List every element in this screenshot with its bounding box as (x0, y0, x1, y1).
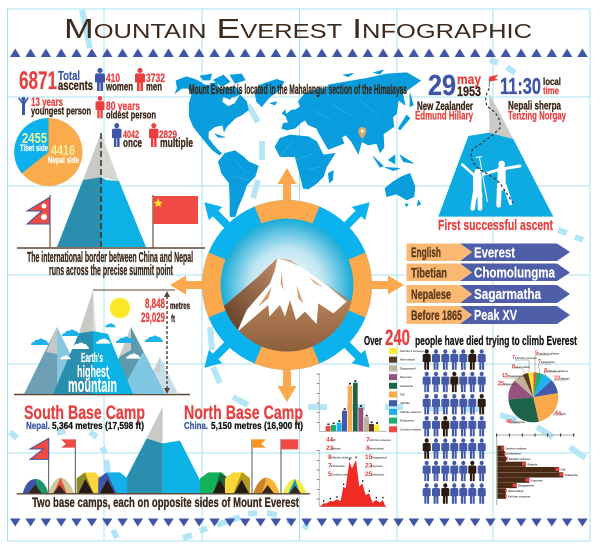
bottom triangle border (8, 518, 590, 528)
border caption: runs across the precise summit point (49, 263, 173, 279)
death counts: Fall into crevasse (369, 438, 391, 442)
death counts: 15 (365, 454, 373, 461)
name label: English (406, 244, 570, 262)
pie chart: causes of death: Cerebral oedema (538, 352, 560, 356)
name label: Tibetan (406, 264, 570, 282)
death counts: 8 (366, 445, 370, 452)
name label: Tibetan: Tibetian (411, 264, 447, 280)
climber names: Nepali sherpa (508, 100, 561, 112)
name label: English: Everest (474, 244, 515, 262)
horizontal bar chart: Exposure (531, 478, 543, 482)
pie chart: causes of death: Exhaustion (541, 360, 555, 364)
climber names: Edmund Hillary (415, 110, 473, 122)
height measurement arrow: ft (171, 314, 175, 325)
bar chart legend: Exhaustion (400, 419, 414, 423)
Earth's highest mountain illustration: highest (77, 362, 109, 381)
horizontal bar chart: Avalanche (565, 473, 578, 477)
North Base Camp heading: China. (184, 420, 208, 432)
death counts: 23 (326, 445, 334, 452)
name label: before 1865 (406, 306, 570, 324)
pie chart: causes of death: 15 (502, 373, 508, 379)
name label: before 1865: Peak XV (474, 307, 517, 324)
height measurement arrow: 29,029 (141, 309, 165, 325)
pie chart: causes of death: Avalanche (512, 420, 525, 424)
name label: Nepalese: Nepalese (411, 286, 451, 302)
pie chart: causes of death: Altitude sickness (547, 369, 569, 373)
North Base Camp heading (184, 402, 303, 432)
statistics: once and multiple: multiple (160, 135, 193, 150)
pie chart: causes of death: 23 (554, 376, 560, 382)
death counts: Altitude (331, 446, 341, 450)
deaths heading (364, 325, 578, 350)
first ascent date (428, 70, 481, 102)
pie chart: causes of death: 7 (538, 359, 541, 365)
central mountain illustration (220, 218, 354, 357)
death counts: 23 (365, 462, 373, 470)
deaths heading: Over (364, 334, 382, 348)
death counts: Exposure (371, 464, 383, 468)
pie chart: causes of death: Fall into crevasse (515, 356, 537, 360)
first ascent date: may (457, 71, 481, 87)
pie chart: causes of death: Exposure (504, 382, 516, 386)
pie chart: Tibet and Nepal side: Tibet side (20, 143, 48, 153)
area chart (317, 450, 387, 507)
pie chart: causes of death: 5 (535, 350, 538, 356)
death counts: Altitude sickness (331, 456, 353, 460)
death counts: 25 (365, 471, 373, 478)
South Base Camp heading: Nepal. (26, 420, 50, 432)
statistics: ascents: 6871 (19, 67, 57, 95)
death counts: 5 (328, 471, 332, 478)
horizontal bar chart: Fall (561, 468, 565, 472)
bar chart legend: Fall into a crevasse (400, 349, 424, 353)
horizontal bar chart (497, 433, 578, 505)
North Base Camp heading: 5,150 metres (16,900 ft) (211, 420, 303, 432)
bar chart legend: Heart attack (400, 358, 415, 362)
pictogram: people who died (423, 349, 486, 504)
base camps illustration (17, 407, 310, 494)
horizontal bar chart: Exhaustion (507, 452, 521, 456)
death counts: Heart attack (369, 446, 384, 450)
statistics: ages: 13 years (31, 95, 63, 109)
statistics: ages (18, 95, 156, 122)
name label: Nepalese: Sagarmatha (474, 286, 542, 303)
Earth's highest mountain illustration: Earth's (81, 350, 103, 365)
arrows around the central compass (170, 168, 404, 402)
death counts: Exhaustion (331, 464, 345, 468)
Earth's highest mountain illustration: mountain (68, 375, 117, 397)
death counts: Disappeared (371, 456, 387, 460)
top triangle border (8, 48, 590, 58)
statistics: ascents: Total (58, 68, 80, 83)
pie chart: causes of death: 7 (512, 355, 515, 361)
icon: map pin (358, 127, 366, 139)
pie chart: causes of death: 25 (498, 381, 504, 387)
height measurement arrow: metres (170, 301, 190, 312)
statistics: ascents: 410 (106, 73, 120, 85)
world map (175, 70, 421, 217)
pie chart: Tibet and Nepal side (14, 118, 83, 186)
first ascent caption: First successful ascent (438, 218, 553, 234)
bar chart legend: Exposure (400, 375, 412, 379)
first ascent time: time (543, 85, 559, 97)
statistics: ascents: men (146, 82, 162, 94)
name label: Tibetan: Chomolungma (474, 264, 556, 282)
pie chart: causes of death: 8 (544, 368, 547, 374)
horizontal bar chart: Disappeared (518, 484, 534, 488)
horizontal bar chart: Altitude sickness (509, 457, 531, 461)
bar chart legend: Cerebral oedema (400, 427, 422, 431)
border mountain with flags (17, 133, 205, 248)
statistics: once and multiple: 4042 (123, 129, 139, 141)
border caption (27, 250, 193, 279)
statistics: once and multiple: once (123, 135, 142, 150)
pie chart: causes of death: Fall (561, 412, 566, 416)
name label: before 1865: Before 1865 (411, 307, 462, 323)
title: Mountain Everest Infographic (64, 13, 532, 44)
first ascent date: 29 (428, 70, 456, 102)
first ascent time: local (543, 76, 561, 88)
bar chart legend: Fall (400, 392, 405, 396)
pie chart: causes of death: 44 (555, 411, 562, 417)
name label: English: English (411, 244, 441, 260)
bar chart legend (389, 348, 424, 432)
deaths heading: 240 (385, 325, 410, 350)
pie chart: causes of death: Disappeared (508, 374, 524, 378)
pie chart: Tibet and Nepal side: 2455 (22, 130, 47, 147)
statistics: ascents (19, 67, 165, 95)
bar chart (317, 373, 387, 431)
bar chart legend: Disappeared (400, 366, 416, 370)
climber names (415, 100, 566, 122)
pie chart: causes of death (497, 350, 570, 425)
statistics: ascents: 3732 (146, 73, 165, 85)
statistics: ages: oldest person (106, 110, 156, 122)
North Base Camp heading: North Base Camp (184, 402, 303, 424)
death counts: 44 (326, 436, 334, 444)
bar chart legend: Altitude (400, 401, 410, 405)
horizontal bar chart: Fall into crevasse (508, 494, 531, 498)
pie chart: causes of death: Altitude (560, 376, 570, 380)
summit illustration with climbers (438, 75, 553, 217)
South Base Camp heading: 5,364 metres (17,598 ft) (52, 420, 144, 432)
horizontal bar chart: Cerebral oedema (505, 446, 527, 450)
climber names: Tenzing Norgay (508, 110, 566, 122)
statistics: ascents: women (105, 82, 133, 94)
statistics: once and multiple: 2829 (159, 129, 177, 141)
climber names: New Zealander (417, 101, 473, 113)
pie chart: causes of death: 46 (506, 419, 512, 425)
death counts: Fall (331, 438, 336, 442)
statistics: ascents: ascents (58, 78, 93, 93)
bar chart legend: Avalanche (400, 384, 413, 388)
pie chart: Tibet and Nepal side: Nepal side (48, 155, 79, 165)
height measurement arrow (141, 291, 190, 394)
death counts: 8 (328, 454, 332, 461)
death counts: 7 (366, 436, 370, 444)
horizontal bar chart: Altitude (527, 462, 538, 466)
death counts: Cerebral oedema (331, 472, 353, 476)
base camps caption: Two base camps, each on opposite sides of Mount Everest (32, 494, 299, 510)
death counts (326, 436, 391, 478)
death counts: 7 (328, 462, 332, 470)
Earth's highest mountain illustration (14, 290, 190, 397)
pie chart: causes of death: Heart attack (515, 365, 530, 369)
pie chart: causes of death: 8 (512, 364, 515, 370)
statistics: once and multiple (112, 123, 193, 150)
South Base Camp heading (24, 402, 145, 432)
first ascent time: 11:30 (500, 73, 541, 99)
text: The international border between China and Nepal (27, 250, 193, 266)
South Base Camp heading: South Base Camp (24, 402, 145, 424)
bar chart legend: Altitude sickness (400, 410, 422, 414)
statistics: ages: 80 years (106, 99, 140, 113)
horizontal bar chart: Heart attack (508, 489, 524, 493)
death counts: Avalanche (371, 472, 384, 476)
height measurement arrow: 8,848 (145, 295, 165, 311)
name label: Nepalese (406, 285, 570, 303)
first ascent date: 1953 (457, 83, 481, 99)
pie chart: Tibet and Nepal side: 4416 (51, 142, 75, 159)
statistics: ages: youngest person (31, 106, 91, 118)
central compass ring (202, 200, 372, 370)
